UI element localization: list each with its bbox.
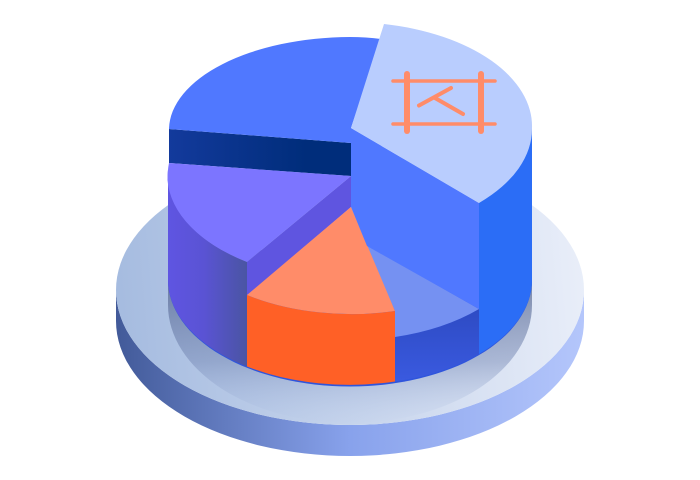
slice: light raised wedge <box>351 24 532 354</box>
purple outer wall <box>168 170 247 366</box>
cylinder shadow on base <box>168 250 532 423</box>
base platform side <box>116 290 584 456</box>
low blue side <box>395 309 479 382</box>
orange top <box>247 207 395 314</box>
cylinder bottom rim <box>168 280 532 386</box>
purple inner wall <box>247 176 351 296</box>
low blue top <box>365 244 479 337</box>
blue slice top <box>169 37 381 143</box>
base platform top <box>116 155 584 425</box>
slice: low blue <box>365 244 479 382</box>
icon: crop frame with check mark <box>393 74 495 131</box>
slice: purple <box>168 163 351 366</box>
orange side <box>247 295 395 385</box>
light wedge top <box>351 24 532 203</box>
dark band wall <box>169 129 351 176</box>
blue inner wall <box>351 128 479 309</box>
slice: orange <box>247 207 395 385</box>
blue outer wall <box>479 128 532 354</box>
purple top <box>168 163 351 262</box>
slice: dark blue side band and top <box>169 37 381 176</box>
